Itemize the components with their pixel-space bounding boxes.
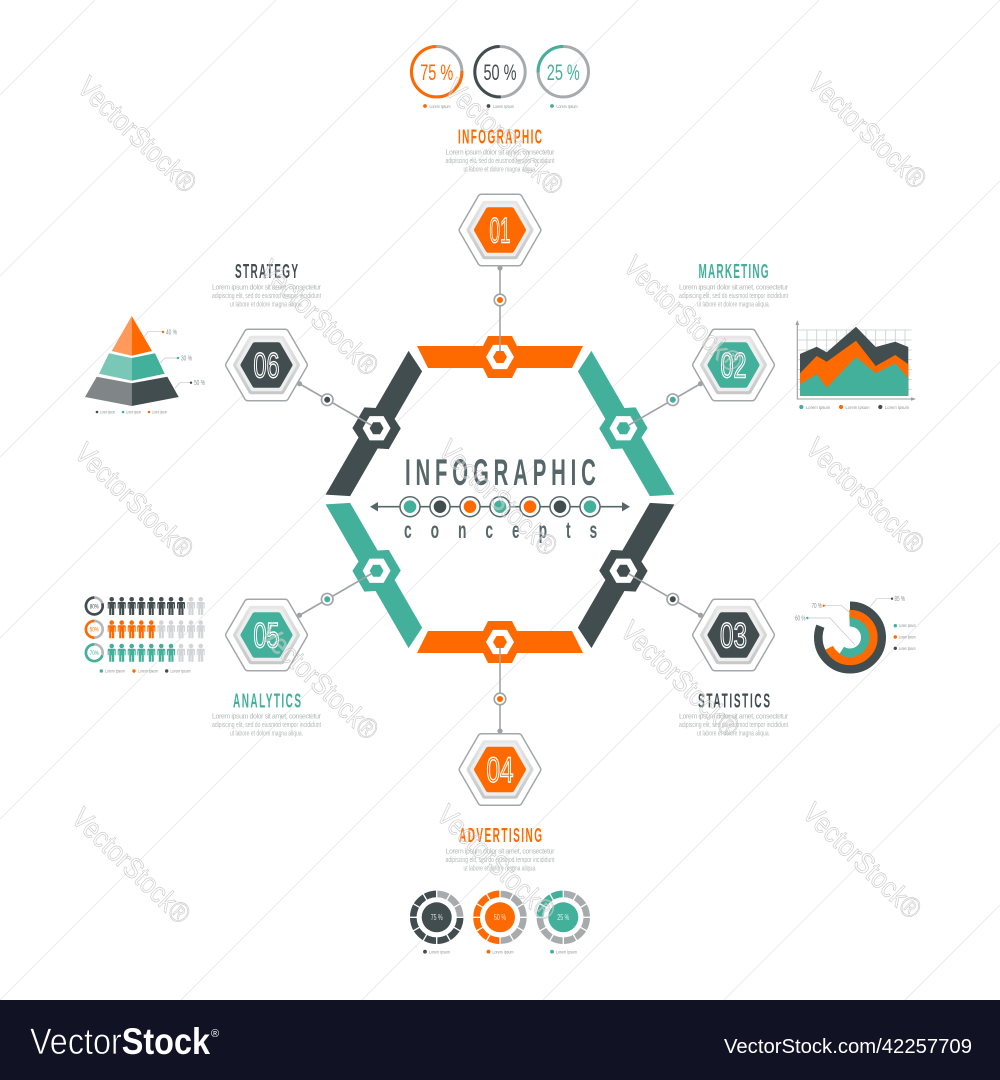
watermarks: VectorStock® xyxy=(430,799,561,928)
text block: statistics: Lorem ipsum dolor sit amet, consectetur xyxy=(679,714,789,720)
badge 06 xyxy=(230,333,304,397)
watermarks: VectorStock® xyxy=(617,250,748,379)
watermarks: VectorStock® xyxy=(799,432,930,561)
top progress rings: 25 % xyxy=(547,60,580,85)
text block: strategy: adipiscing elit, sed do eiusmod tempor incididunt xyxy=(212,293,321,300)
text block: marketing: MARKETING xyxy=(698,262,768,283)
footer registered mark: ® xyxy=(211,1028,219,1040)
segment: lower left teal xyxy=(256,488,436,688)
arrow timeline with dots xyxy=(370,497,630,517)
text block: analytics: ut labore et dolore magna aliqua. xyxy=(230,730,303,738)
bottom segmented rings xyxy=(409,889,591,954)
segment: lower right dark xyxy=(564,488,744,688)
text block: infographic: Lorem ipsum dolor sit amet, consectetur xyxy=(446,150,555,156)
badge 05: 05 xyxy=(254,616,280,656)
text block: statistics: adipiscing elit, sed do eiusmod tempor incididunt xyxy=(679,722,788,729)
watermarks: VectorStock® xyxy=(253,254,384,383)
central hexagon ring xyxy=(256,265,744,734)
heading: infographic: INFOGRAPHIC xyxy=(405,453,596,494)
area chart: Lorem Ipsum xyxy=(806,405,830,410)
text block: advertising: ut labore et dolore magna aliqua. xyxy=(464,866,537,872)
badge 03: 03 xyxy=(720,616,747,656)
badge 03 xyxy=(696,603,770,667)
text block: infographic xyxy=(446,127,555,174)
badge 04 xyxy=(463,738,537,802)
people chart: Lorem Ipsum xyxy=(138,669,158,674)
area chart: Lorem Ipsum xyxy=(885,405,909,410)
center title xyxy=(370,453,630,544)
ring: 50 percent xyxy=(472,889,528,945)
text block: strategy xyxy=(212,262,322,308)
radial bar chart: 60 % xyxy=(795,616,806,622)
ring: 75 percent xyxy=(409,889,465,945)
radial bar chart xyxy=(795,596,916,669)
text block: advertising xyxy=(446,826,555,872)
text block: advertising: ADVERTISING xyxy=(459,826,542,847)
segment: upper right teal xyxy=(564,311,744,511)
watermarks: VectorStock® xyxy=(614,615,745,744)
ring: 25 percent: 25 % xyxy=(557,913,569,922)
text block: statistics: STATISTICS xyxy=(698,691,770,713)
bottom segmented rings: Lorem Ipsum xyxy=(492,949,514,954)
badge 04: 04 xyxy=(486,751,514,790)
segment: bottom orange xyxy=(417,621,583,734)
text block: analytics: Lorem ipsum dolor sit amet, consectetur xyxy=(212,714,322,720)
pyramid chart: 30 % xyxy=(181,356,192,362)
radial bar chart: Lorem Ipsum xyxy=(899,634,916,640)
people chart: 80% xyxy=(90,603,99,610)
segment: top orange xyxy=(417,265,583,378)
subheading: concepts: concepts xyxy=(404,519,597,544)
text block: marketing: adipiscing elit, sed do eiusmod tempor incididunt xyxy=(679,293,788,300)
text block: analytics: ANALYTICS xyxy=(233,691,301,713)
footer logo: VectorStock xyxy=(30,1021,210,1062)
people chart: 70% xyxy=(90,650,99,657)
top progress rings: Lorem Ipsum xyxy=(493,104,514,109)
ring: 75 percent: 75 % xyxy=(431,913,443,922)
text block: analytics: adipiscing elit, sed do eiusmod tempor incididunt xyxy=(212,722,321,729)
people chart: 50% xyxy=(90,627,99,634)
watermarks xyxy=(65,67,932,931)
segment: upper left dark xyxy=(256,311,436,511)
badge 05 xyxy=(230,603,304,667)
pyramid chart: 40 % xyxy=(166,330,177,336)
text block: advertising: Lorem ipsum dolor sit amet, consectetur xyxy=(446,848,555,856)
radial bar chart: Lorem Ipsum xyxy=(899,623,916,628)
top progress rings xyxy=(412,46,588,109)
pyramid chart: Lorem Ipsum xyxy=(126,410,141,415)
badge 01 xyxy=(463,198,537,262)
text block: strategy: Lorem ipsum dolor sit amet, consectetur xyxy=(212,284,322,292)
footer url: VectorStock.com/42257709 xyxy=(724,1036,972,1058)
ring: 50 percent: 50 % xyxy=(494,913,506,922)
radial bar chart: 70 % xyxy=(812,603,822,610)
watermarks: VectorStock® xyxy=(71,71,202,200)
watermarks: VectorStock® xyxy=(65,802,196,931)
text block: statistics: ut labore et dolore magna aliqua. xyxy=(697,730,770,738)
footer bar xyxy=(0,1000,1000,1080)
text block: statistics xyxy=(679,691,789,738)
watermarks: VectorStock® xyxy=(801,67,932,196)
people chart: Lorem Ipsum xyxy=(170,669,191,674)
text block: strategy: STRATEGY xyxy=(235,262,298,283)
badge 06: 06 xyxy=(254,346,280,386)
watermarks: VectorStock® xyxy=(796,797,927,926)
bottom segmented rings: Lorem Ipsum xyxy=(429,949,450,954)
pyramid chart xyxy=(85,316,205,415)
watermarks: VectorStock® xyxy=(253,618,384,747)
top progress rings: 75 % xyxy=(420,60,453,85)
radial bar chart: 85 % xyxy=(894,596,905,603)
bottom segmented rings: Lorem Ipsum xyxy=(556,949,577,954)
area chart: Lorem Ipsum xyxy=(846,405,870,410)
text block: marketing: Lorem ipsum dolor sit amet, consectetur xyxy=(679,284,789,292)
text block: infographic: INFOGRAPHIC xyxy=(458,127,542,149)
people chart: Lorem Ipsum xyxy=(105,669,125,674)
people chart xyxy=(84,595,205,674)
radial bar chart: Lorem Ipsum xyxy=(899,646,916,651)
watermarks: VectorStock® xyxy=(68,437,199,566)
ring: 25 percent xyxy=(535,889,591,945)
badge 01: 01 xyxy=(490,212,510,250)
watermarks: VectorStock® xyxy=(438,73,569,202)
badge 02 xyxy=(696,333,770,397)
area chart xyxy=(796,320,916,410)
text block: advertising: adipiscing elit, sed do eiusmod tempor incididunt xyxy=(446,857,555,864)
badge 02: 02 xyxy=(720,346,746,386)
pyramid chart: Lorem Ipsum xyxy=(100,410,115,415)
watermarks: VectorStock® xyxy=(432,434,563,563)
top progress rings: 50 % xyxy=(484,60,516,85)
text block: analytics xyxy=(212,691,322,738)
text block: strategy: ut labore et dolore magna aliqua. xyxy=(230,302,303,308)
text block: marketing: ut labore et dolore magna aliqua. xyxy=(697,302,770,308)
text block: marketing xyxy=(679,262,789,308)
text block: infographic: ut labore et dolore magna aliqua. xyxy=(464,166,537,174)
pyramid chart: 50 % xyxy=(194,380,205,387)
text block: infographic: adipiscing elit, sed do eiusmod tempor incididunt xyxy=(446,158,555,165)
pyramid chart: Lorem Ipsum xyxy=(152,410,167,415)
top progress rings: Lorem Ipsum xyxy=(556,104,578,109)
top progress rings: Lorem Ipsum xyxy=(430,104,451,109)
